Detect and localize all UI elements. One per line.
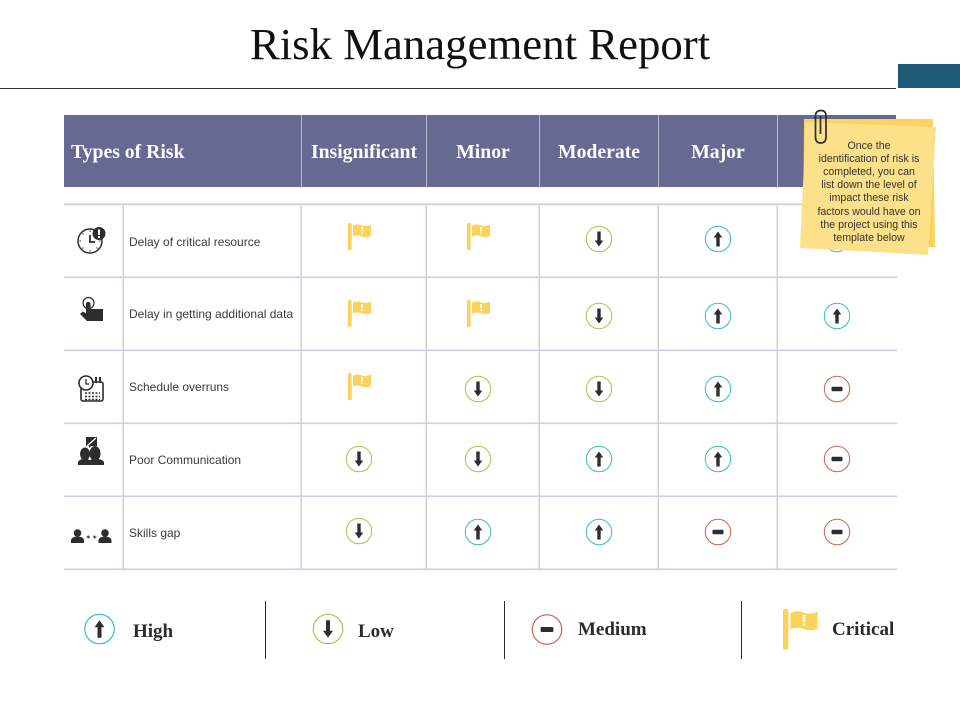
icon: clock and calendar <box>79 376 103 401</box>
icon: clock with alert <box>78 227 106 253</box>
title: Risk Management Report <box>250 19 710 69</box>
header: types of risk: Types of Risk <box>71 141 184 163</box>
header: moderate: Moderate <box>558 141 640 163</box>
header: minor: Minor <box>456 141 510 163</box>
legend icon: medium <box>532 615 562 644</box>
rating icons row 4 <box>346 446 850 472</box>
legend dividers <box>265 601 742 659</box>
title rule and accent block <box>0 64 960 89</box>
row label: schedule overruns: Schedule overruns <box>129 380 229 394</box>
legend icon: critical flag <box>783 609 818 650</box>
sticky note text: impact these risk <box>829 192 909 204</box>
sticky note <box>800 110 936 255</box>
icon: paper clip <box>816 110 826 143</box>
rating icons row 2 <box>348 300 850 329</box>
sticky note text <box>817 140 921 244</box>
legend label: medium: Medium <box>578 619 647 640</box>
sticky note text: Once the <box>848 140 890 152</box>
row label: poor communication: Poor Communication <box>129 453 241 467</box>
rating icons row 3 <box>348 373 850 402</box>
rating icons row 1 <box>348 223 850 252</box>
icon: two people linked <box>71 529 112 543</box>
sticky note text: list down the level of <box>821 179 917 191</box>
sticky note text: completed, you can <box>823 166 915 178</box>
legend label: low: Low <box>358 621 394 642</box>
header: insignificant: Insignificant <box>311 141 417 163</box>
legend label: high: High <box>133 621 173 642</box>
icon: people with crossed speech bubble <box>78 437 104 465</box>
legend label: critical: Critical <box>832 619 894 640</box>
row label: delay in getting additional data: Delay in getting additional data <box>129 307 293 321</box>
sticky note text: identification of risk is <box>819 153 919 165</box>
row label: skills gap: Skills gap <box>129 526 180 540</box>
legend icon: low <box>313 614 343 644</box>
row label: delay of critical resource: Delay of critical resource <box>129 235 260 249</box>
icon: hand pointer <box>80 298 103 321</box>
sticky note text: template below <box>833 232 905 244</box>
sticky note text: the project using this <box>820 219 918 231</box>
legend icon: high <box>85 614 114 644</box>
header: major: Major <box>691 141 745 163</box>
sticky note text: factors would have on <box>817 206 921 218</box>
rating icons row 5 <box>346 518 850 545</box>
